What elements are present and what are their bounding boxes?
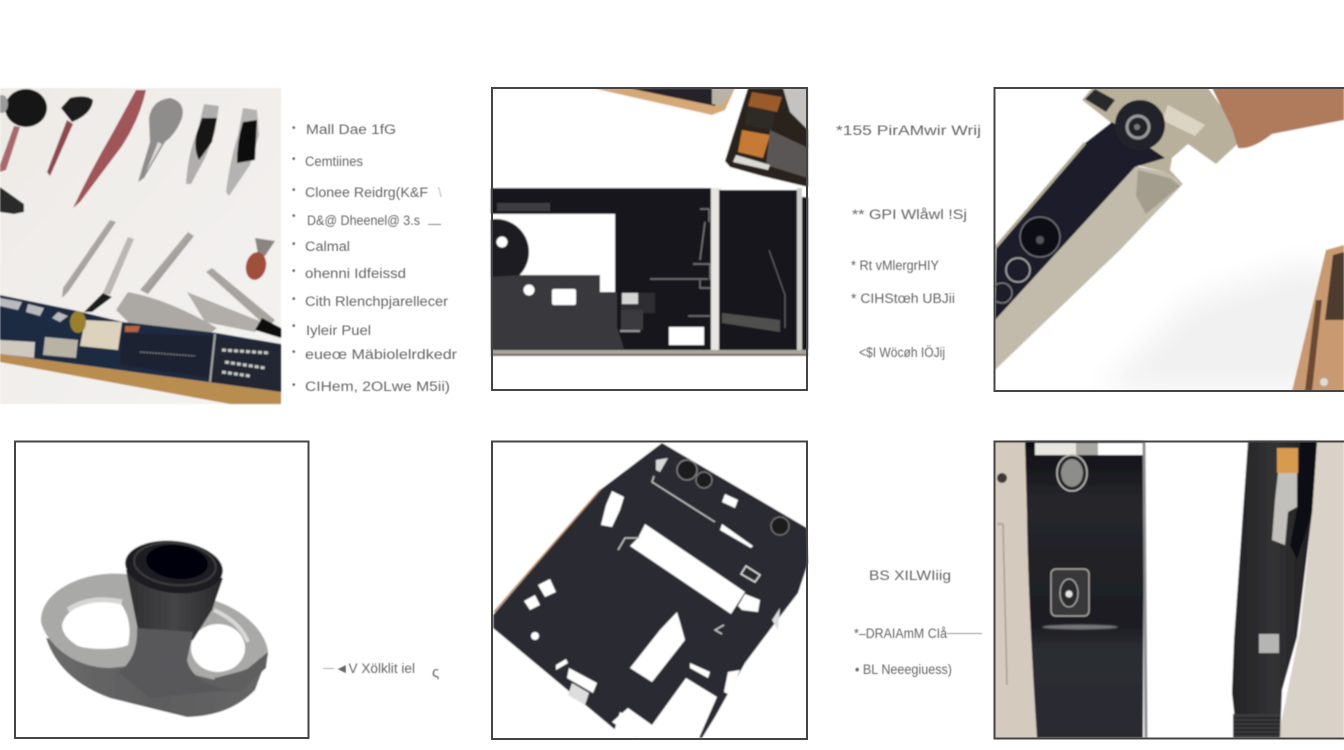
body shaded facet: [1136, 170, 1180, 214]
text block: specs middle: *155 PirAMwir Wrij: [836, 123, 981, 138]
beige body: [995, 166, 1183, 370]
text block: tool list: •: [292, 185, 296, 196]
black back panel: [1025, 441, 1144, 738]
beige left side: [994, 441, 1039, 739]
panel frame: camera bar: [994, 88, 1344, 391]
slot cutouts: [720, 494, 753, 548]
text block: tool list: •: [292, 239, 296, 250]
text block: tool list: D&@ Dheenel@ 3.s: [307, 213, 420, 228]
text block: tool list: Calmal: [305, 239, 350, 254]
metal bracket: [1082, 88, 1244, 184]
chip strip: [722, 313, 780, 332]
trace line: [769, 250, 785, 328]
text block: tool list: \: [438, 185, 442, 200]
silver tab: [1272, 473, 1297, 545]
left hole: [62, 601, 130, 649]
panel frame: black phone: [994, 442, 1344, 738]
icon: large black brush: [0, 89, 47, 172]
text block: specs lower: [854, 568, 982, 677]
silver divider: [711, 188, 721, 352]
bottom white cutout: [612, 712, 645, 738]
text block: tool list: •: [292, 123, 296, 134]
bracket highlight: [1162, 105, 1205, 136]
text block: specs middle: [836, 123, 981, 360]
divider: [1144, 441, 1146, 738]
phone rim: [493, 443, 808, 738]
lens lower: [992, 283, 1012, 303]
text block: tool list: •: [292, 347, 296, 358]
mount top ring: [41, 573, 268, 680]
right edge device: [1292, 245, 1344, 391]
text block: tool list: [292, 122, 458, 394]
grey inner plate: [491, 275, 624, 349]
ring dark lower right: [205, 652, 268, 692]
neck: [126, 570, 223, 640]
icon: silver pen one: [62, 220, 116, 298]
soft shadow: [1100, 262, 1344, 390]
icon: silver pen three: [140, 232, 194, 294]
text block: specs middle: <$I Wöcøh IÖJij: [859, 345, 945, 360]
highlight: [1042, 624, 1118, 630]
outline traces: [618, 476, 724, 634]
bottom rails: [491, 350, 808, 356]
ridged connector: [1233, 714, 1280, 738]
left hole inner edge: [68, 600, 122, 610]
text block: tool list: Mall Dae 1fG: [306, 122, 396, 137]
icon: grey brush: [138, 98, 183, 182]
collar opening: [144, 542, 210, 582]
panel: rubber mount photo: [14, 441, 308, 738]
text block: tool list: Iyleir Puel: [306, 323, 371, 338]
white rectangle: [669, 327, 704, 345]
long white window: [630, 524, 745, 614]
text block: tool list: •: [292, 321, 296, 332]
lower white window: [630, 612, 685, 682]
text block: tool list: Cemtiines: [305, 154, 363, 169]
rim gold edge: [494, 490, 600, 612]
panel: phone back diagonal photo: [491, 441, 808, 739]
circuit board: [0, 295, 281, 392]
text block: mount label: [323, 661, 439, 681]
text block: tool list: •: [292, 266, 296, 277]
icon: red bulb tool: [243, 238, 275, 282]
plate holes: [524, 284, 576, 305]
text block: specs lower: *–DRAIAmM CIå: [854, 626, 947, 641]
bracket dark tab: [1085, 89, 1115, 112]
left cutouts: [524, 579, 556, 640]
QR label: [1259, 634, 1279, 653]
text block: mount label: ς: [432, 664, 439, 681]
dark disc: [463, 219, 529, 285]
text block: specs lower: • BL Neeegiuess): [855, 662, 952, 677]
bottom left details: [556, 659, 597, 705]
beige right side: [1278, 441, 1344, 738]
camera module: [1051, 569, 1089, 616]
traces: [650, 209, 728, 316]
icon: metal clip tools: [187, 268, 281, 338]
lens middle: [1020, 217, 1060, 257]
text block: tool list: •: [292, 294, 296, 305]
top white strip: [1035, 443, 1144, 455]
panel frame: rubber mount: [15, 442, 308, 738]
text block: mount label: ◄V Xölklit iel: [335, 661, 415, 676]
screw: [997, 473, 1007, 483]
window tab: [738, 594, 760, 612]
right details: [690, 608, 780, 695]
text block: tool list: ohenni Idfeissd: [305, 266, 406, 281]
top chip: [656, 458, 668, 472]
icon: black tipped tool one: [186, 104, 219, 184]
neck lower blend: [118, 628, 228, 698]
side groove: [997, 524, 1007, 685]
black tube: [1232, 441, 1317, 738]
text block: tool list: •: [292, 211, 296, 222]
top left cutout: [601, 491, 624, 527]
panel: camera bar photo: [992, 87, 1344, 391]
panel: tools photo: [0, 88, 281, 404]
orange tab: [1277, 448, 1298, 473]
icon: red blade: [73, 90, 146, 208]
panel frame: phone internals: [492, 88, 807, 390]
text block: tool list: •: [292, 380, 296, 391]
right hole: [191, 624, 245, 672]
lens large: [1115, 100, 1165, 150]
text block: specs middle: * Rt vMlergrHIY: [851, 258, 939, 273]
right black panel: [719, 190, 797, 352]
tube back stripe: [1290, 441, 1317, 560]
fingertip: [1212, 88, 1344, 148]
text block: tool list: CIHem, 2OLwe M5ii): [305, 379, 450, 394]
panel: black phone back and tube photo: [994, 441, 1344, 739]
connector: [620, 293, 655, 332]
icon: black grip pen two: [84, 237, 134, 312]
wooden base: [0, 354, 281, 404]
icon: black tipped tool two: [226, 108, 259, 196]
faint label bar: [497, 203, 550, 211]
text block: tool list: eueœ Mäbiolelrdkedr: [305, 347, 458, 362]
panel frame: phone back: [492, 442, 807, 739]
phone corner top: [592, 88, 735, 115]
icon: comb tool: [0, 187, 24, 214]
panel: phone internals close-up: [463, 87, 808, 390]
top lens: [1057, 455, 1087, 491]
camera lenses: [677, 460, 789, 535]
right hole inner edge: [214, 610, 248, 642]
text block: tool list: Clonee Reidrg(K&F: [305, 185, 428, 200]
edge highlight: [995, 143, 1085, 248]
square outline: [741, 566, 760, 582]
collar: [123, 536, 225, 598]
text block: tool list: •: [292, 154, 296, 165]
lens small: [1006, 258, 1030, 282]
collar ridge: [132, 539, 218, 589]
text block: tool list: Cith Rlenchpjarellecer: [305, 294, 449, 309]
far right strip: [797, 188, 808, 353]
text block: specs lower: BS XILWIiig: [869, 568, 951, 583]
text block: specs middle: * CIHStœh UBJii: [851, 291, 955, 306]
icon: grey wedge: [116, 292, 217, 342]
phone corner right: [725, 88, 808, 187]
icon: small black brush: [47, 96, 93, 176]
mount base: [46, 638, 268, 717]
text block: specs middle: ** GPI Wlåwl !Sj: [852, 207, 967, 222]
dark strip: [995, 122, 1165, 320]
white cutout: [491, 214, 615, 292]
dark back panel: [491, 188, 712, 353]
